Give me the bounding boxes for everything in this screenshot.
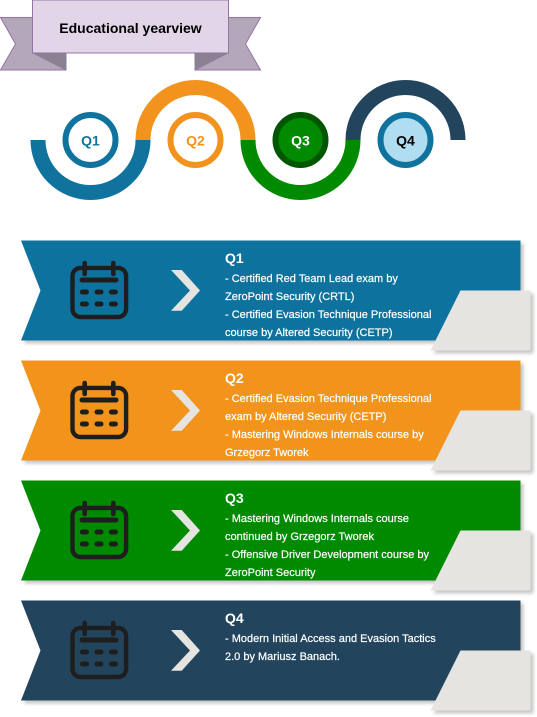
badge: Q1: Q1 — [81, 132, 100, 148]
badge: Q4: Q4 — [396, 132, 415, 148]
title banner — [0, 0, 260, 70]
badge: Q3 — [276, 115, 326, 165]
left ribbon tail — [0, 18, 66, 70]
text: - Certified Red Team Lead exam by — [225, 273, 398, 285]
text: Q3 — [225, 490, 244, 506]
arc: Q2 — [143, 88, 248, 140]
icon: calendar — [72, 623, 126, 677]
text: - Modern Initial Access and Evasion Tactics — [225, 633, 436, 645]
arrow — [171, 270, 200, 311]
arrow — [171, 630, 200, 671]
text: course by Altered Security (CETP) — [225, 327, 393, 339]
panel background — [21, 600, 520, 700]
right fold — [194, 53, 228, 70]
panel background — [21, 480, 520, 580]
text: - Certified Evasion Technique Professional — [225, 393, 431, 405]
arc: Q1 — [38, 140, 143, 192]
icon: calendar — [72, 263, 126, 317]
text: - Offensive Driver Development course by — [225, 549, 429, 561]
panel background — [21, 360, 520, 460]
banner panel — [32, 0, 228, 53]
corner tab — [430, 650, 530, 710]
arc: Q3 — [248, 140, 353, 192]
panel: Q3 — [21, 480, 530, 590]
quarter timeline — [38, 88, 458, 192]
badge: Q4 — [380, 115, 430, 165]
corner tab — [430, 290, 530, 350]
panel background — [21, 240, 520, 340]
panel: Q4 — [21, 600, 530, 710]
text: - Mastering Windows Internals course — [225, 513, 409, 525]
badge: Q1 — [66, 115, 116, 165]
text: - Certified Evasion Technique Professional — [225, 309, 431, 321]
badge: Q2: Q2 — [186, 132, 205, 148]
icon: calendar — [72, 383, 126, 437]
arc: Q4 — [353, 88, 458, 140]
text: Q4 — [225, 610, 244, 626]
text: continued by Grzegorz Tworek — [225, 531, 374, 543]
text: Q1 — [225, 250, 244, 266]
text: Q2 — [225, 370, 244, 386]
text: ZeroPoint Security (CRTL) — [225, 291, 354, 303]
badge: Q2 — [170, 115, 220, 165]
panel: Q2 — [21, 360, 530, 470]
text: 2.0 by Mariusz Banach. — [225, 651, 340, 663]
text: exam by Altered Security (CETP) — [225, 411, 386, 423]
panel: Q1 — [21, 240, 530, 350]
arrow — [171, 510, 200, 551]
text: - Mastering Windows Internals course by — [225, 429, 424, 441]
title: Educational yearview — [59, 20, 202, 36]
text: ZeroPoint Security — [225, 567, 316, 579]
arrow — [171, 390, 200, 431]
text: Grzegorz Tworek — [225, 447, 309, 459]
corner tab — [430, 530, 530, 590]
icon: calendar — [72, 503, 126, 557]
right ribbon tail — [194, 18, 260, 70]
corner tab — [430, 410, 530, 470]
badge: Q3: Q3 — [291, 132, 310, 148]
left fold — [33, 53, 66, 70]
